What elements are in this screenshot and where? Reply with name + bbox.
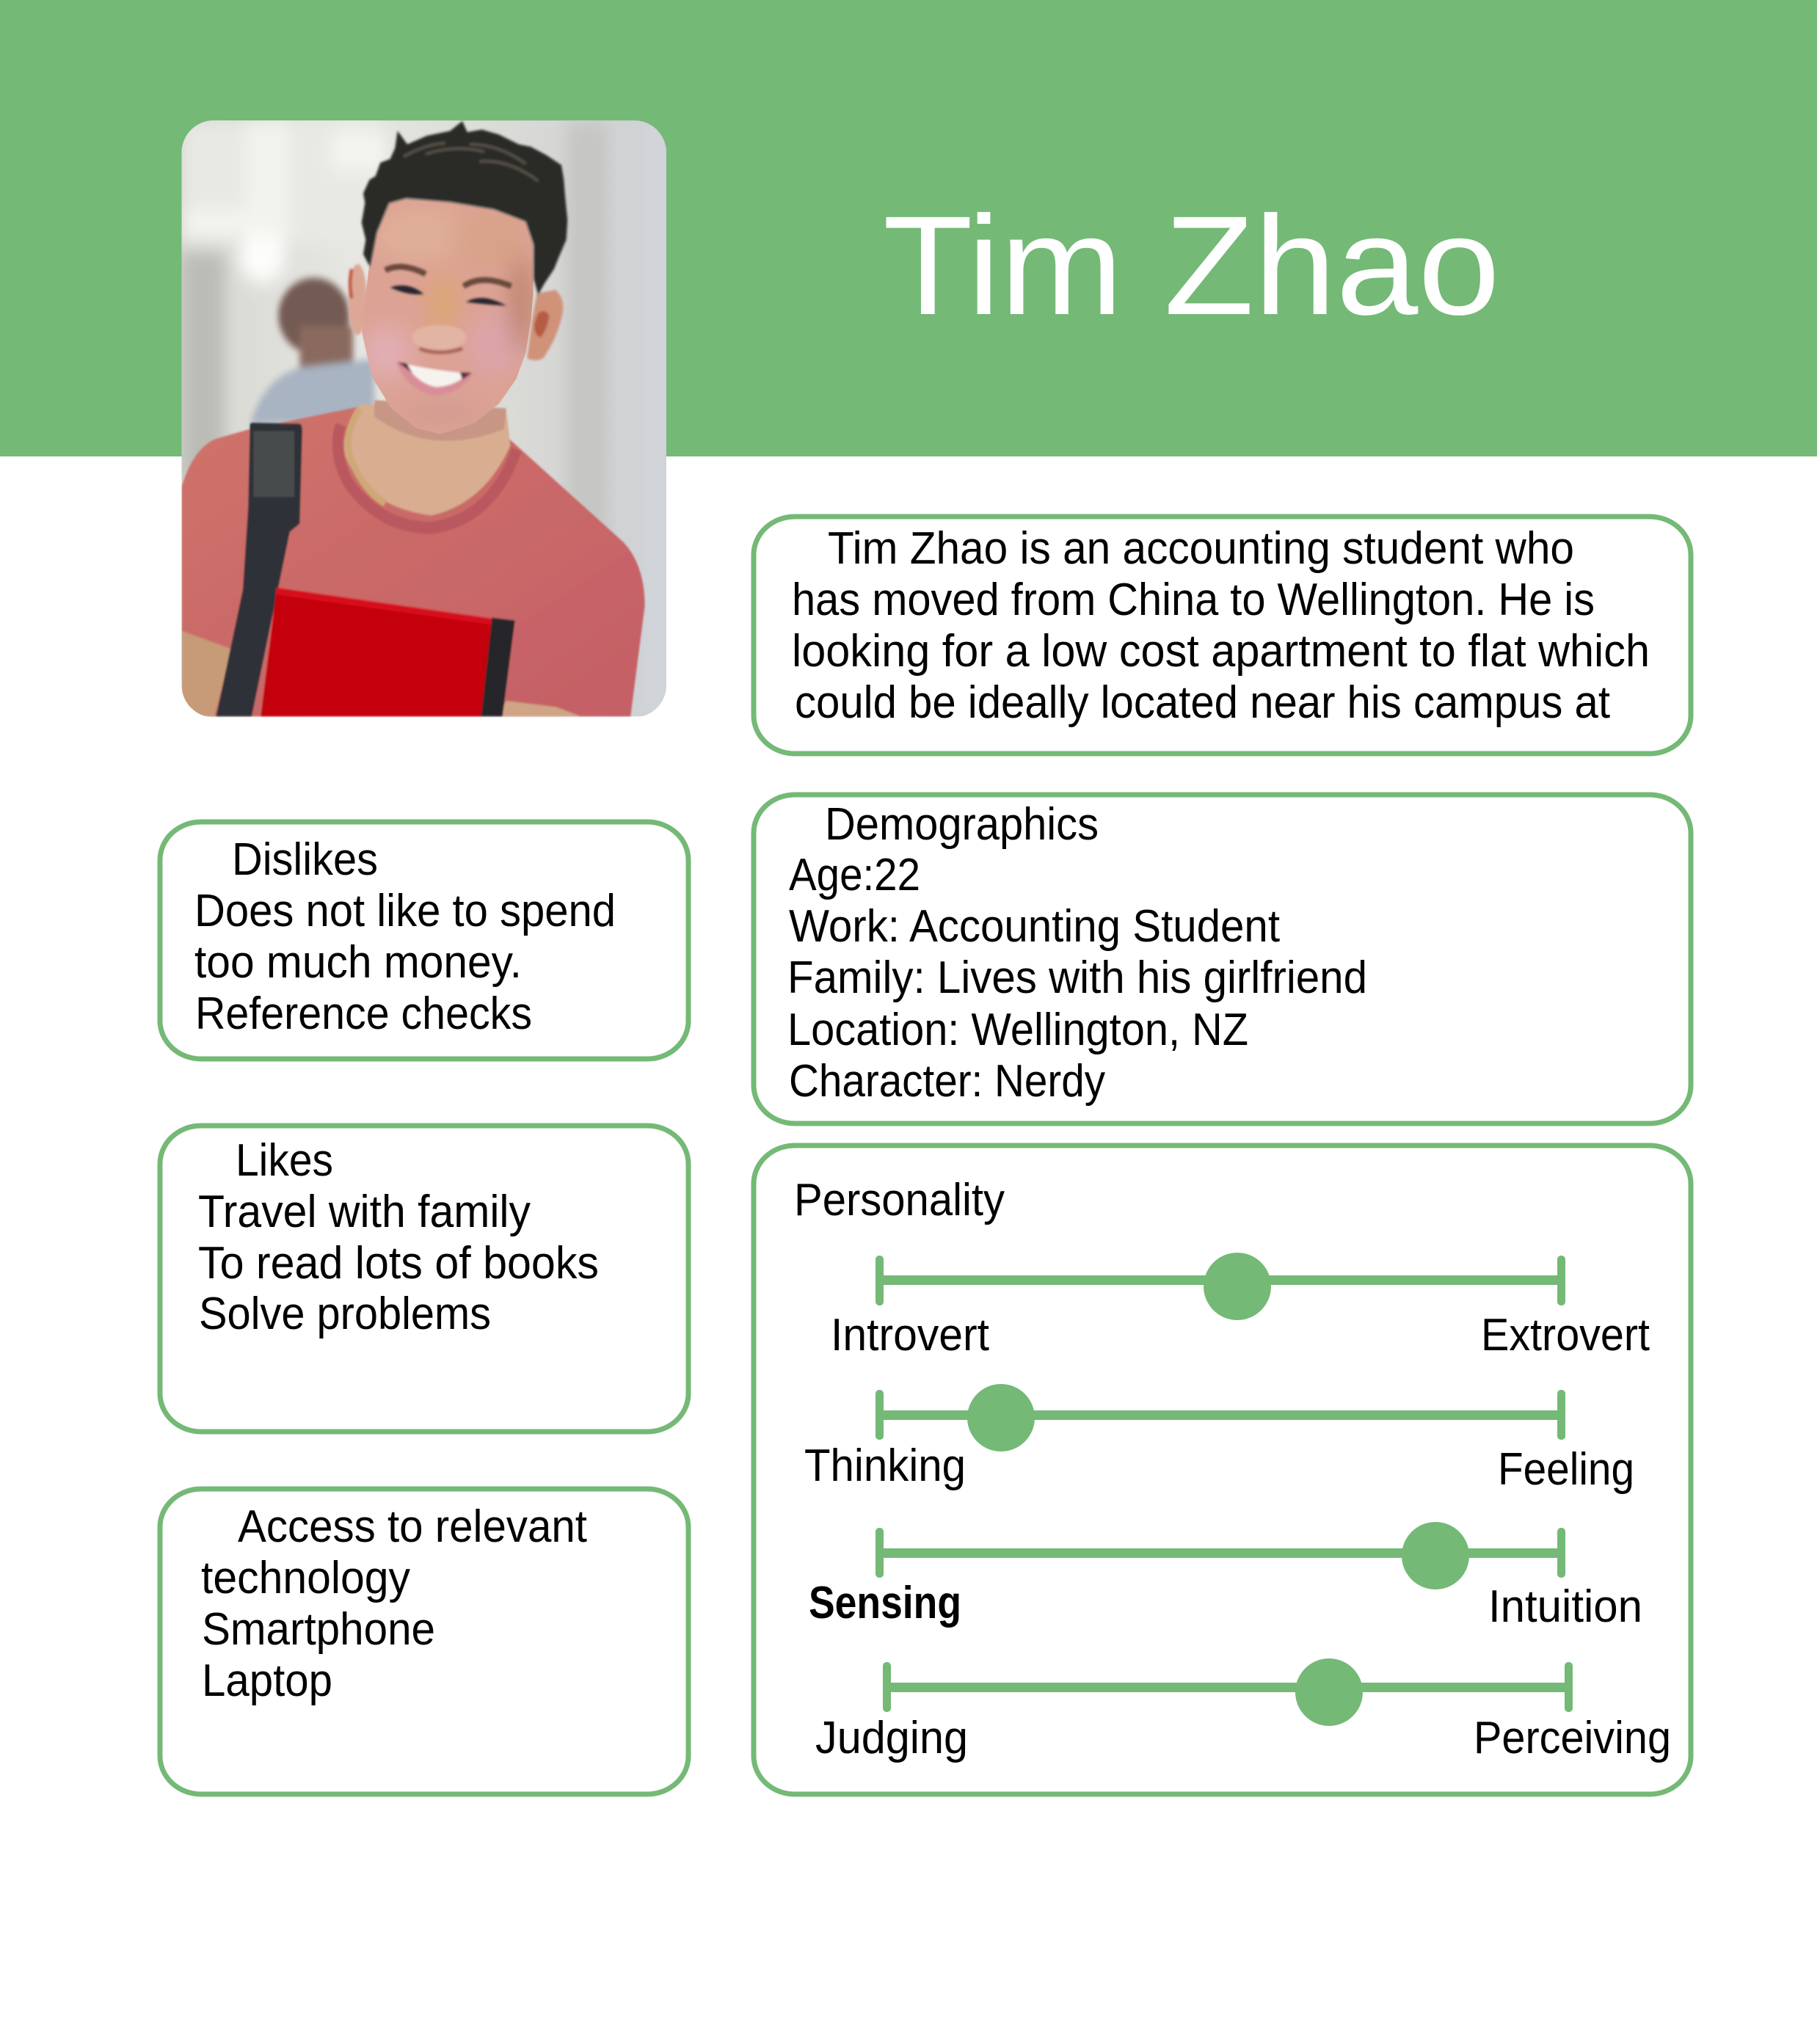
right arm [499,701,580,716]
summary text: Tim Zhao is an accounting student who [828,523,1574,574]
hair [362,121,567,295]
slider: introvert to extrovert: Extrovert [1481,1310,1650,1360]
likes text [198,1135,599,1339]
likes text: Likes [236,1135,333,1186]
demographics text [787,799,1367,1107]
strap [216,423,302,716]
demographics text: Location: Wellington, NZ [787,1005,1248,1055]
neck [344,404,510,515]
slider: sensing to intuition: Intuition [1488,1581,1642,1632]
likes text: Travel with family [198,1187,531,1237]
dislikes text: too much money. [194,937,522,988]
slider: judging to perceiving: Judging [815,1713,968,1763]
left ear [349,264,367,335]
dislikes text: Dislikes [232,834,378,885]
right ear [527,290,563,360]
panel: likes [160,1126,688,1432]
summary text [792,523,1650,728]
shirt [182,405,645,716]
summary text: has moved from China to Wellington. He is [792,575,1595,625]
dislikes text: Reference checks [195,988,532,1039]
technology text [201,1501,587,1706]
slider: sensing to intuition: Sensing [809,1578,961,1628]
demographics text: Character: Nerdy [789,1056,1105,1107]
face [360,196,536,435]
technology text: Laptop [202,1655,332,1706]
technology text: Access to relevant [238,1501,587,1552]
eyes [390,285,423,294]
slider: judging to perceiving: Perceiving [1474,1713,1671,1763]
panel: personality [754,1145,1691,1794]
title: Tim Zhao [883,186,1500,344]
left arm [182,631,232,716]
slider: sensing to intuition [809,1522,1642,1632]
book [481,618,515,716]
demographics text: Work: Accounting Student [789,901,1280,952]
panel: summary [754,517,1691,754]
summary text: could be ideally located near his campus at [795,677,1610,728]
eyebrows [385,267,426,274]
slider: judging to perceiving [815,1658,1671,1763]
personality heading: Personality [794,1175,1005,1225]
dislikes text [194,834,616,1039]
nose [412,325,467,350]
slider: introvert to extrovert: Introvert [831,1310,989,1360]
demographics text: Demographics [825,799,1099,850]
slider: thinking to feeling [804,1384,1634,1495]
panel: dislikes [160,822,688,1059]
panel: access to technology [160,1489,688,1794]
demographics text: Family: Lives with his girlfriend [787,952,1367,1003]
slider: introvert to extrovert [831,1253,1650,1360]
likes text: To read lots of books [198,1238,599,1289]
header band [0,0,1817,456]
likes text: Solve problems [199,1289,491,1339]
summary text: looking for a low cost apartment to flat which [792,626,1650,677]
slider: thinking to feeling: Feeling [1498,1444,1634,1495]
technology text: technology [201,1553,410,1603]
panel: demographics [754,795,1691,1123]
mouth [396,362,473,396]
dislikes text: Does not like to spend [194,886,616,936]
photo: smiling student with red book [182,120,666,716]
slider: thinking to feeling: Thinking [804,1440,966,1491]
demographics text: Age:22 [789,850,920,900]
technology text: Smartphone [202,1604,435,1655]
